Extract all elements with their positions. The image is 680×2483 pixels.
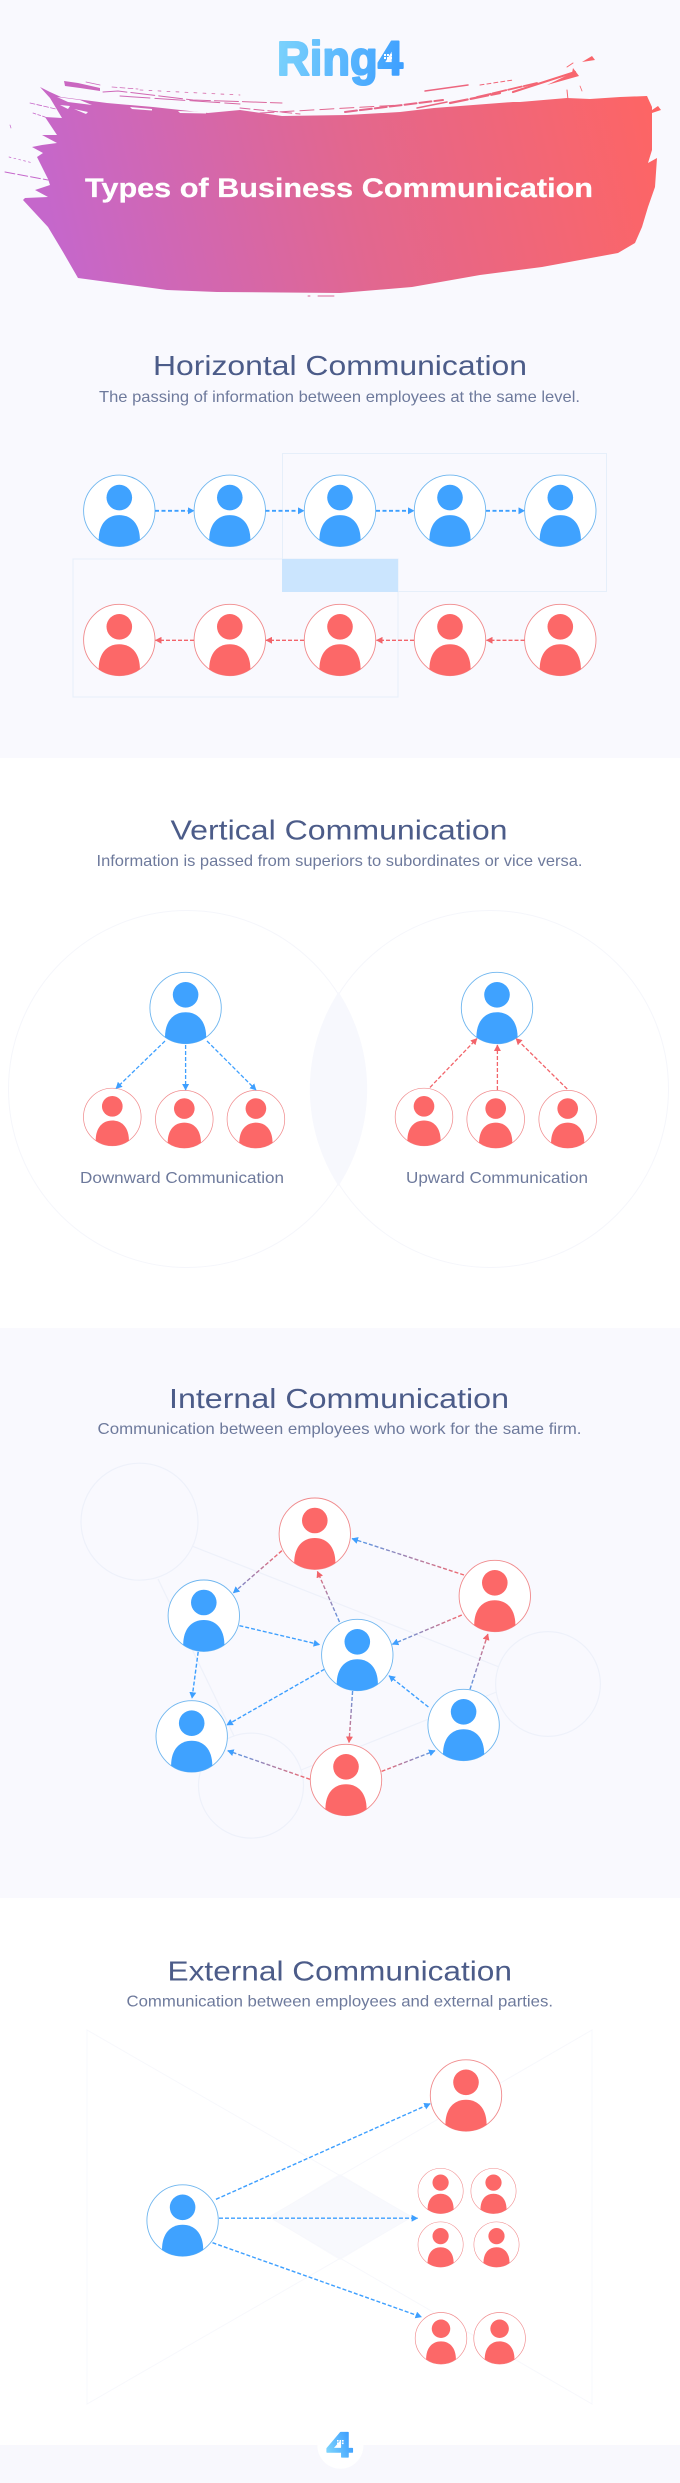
- heading: external: External Communication: [168, 1956, 512, 1987]
- pair of recipients: [415, 2312, 525, 2364]
- background frame: lower left: [73, 559, 398, 697]
- panel: vertical communication: [0, 758, 680, 1328]
- footer band: [0, 2445, 680, 2483]
- upward communication diagram: [395, 972, 597, 1148]
- subtitle: internal: Communication between employees who work for the same firm.: [98, 1421, 582, 1438]
- label: upward: Upward Communication: [406, 1170, 588, 1187]
- red arrows: [156, 639, 524, 641]
- heading: internal: Internal Communication: [169, 1383, 509, 1414]
- brush stroke banner: [5, 56, 661, 296]
- subtitle: vertical: Information is passed from superiors to subordinates or vice versa.: [96, 853, 582, 870]
- heading: horizontal: Horizontal Communication: [153, 350, 527, 381]
- panel: header: [5, 33, 661, 296]
- overlap highlight: [282, 559, 398, 592]
- sender person: [147, 2185, 218, 2256]
- network people: [156, 1498, 530, 1816]
- panel: horizontal communication: [73, 350, 606, 697]
- background bow-tie shape: [87, 2030, 592, 2404]
- footer logo: 4: [326, 2426, 353, 2465]
- single recipient: [430, 2060, 502, 2131]
- red row of people: [84, 604, 596, 676]
- subtitle: external: Communication between employees and external parties.: [126, 1994, 553, 2011]
- heading: vertical: Vertical Communication: [170, 814, 508, 846]
- section background: [0, 1898, 680, 2445]
- background circles with overlap: [8, 910, 668, 1268]
- label: downward: Downward Communication: [80, 1170, 284, 1187]
- panel: external communication: [0, 1898, 680, 2445]
- subtitle: horizontal: The passing of information between employees at the same level.: [99, 389, 580, 406]
- title: Types of Business Communication: [85, 173, 593, 203]
- blue arrows: [155, 510, 524, 512]
- background network: [81, 1463, 600, 1838]
- logo: Ring4: Ring4: [277, 33, 403, 86]
- section background: [0, 758, 680, 1328]
- panel: internal communication: [81, 1383, 600, 1838]
- footer logo: [317, 2423, 363, 2469]
- arrows to recipients: [212, 2104, 430, 2317]
- blue row of people: [84, 475, 596, 547]
- group of four recipients: [418, 2168, 519, 2267]
- downward communication diagram: [83, 972, 285, 1148]
- network arrows: [192, 1539, 488, 1779]
- background frame: upper right: [282, 454, 606, 592]
